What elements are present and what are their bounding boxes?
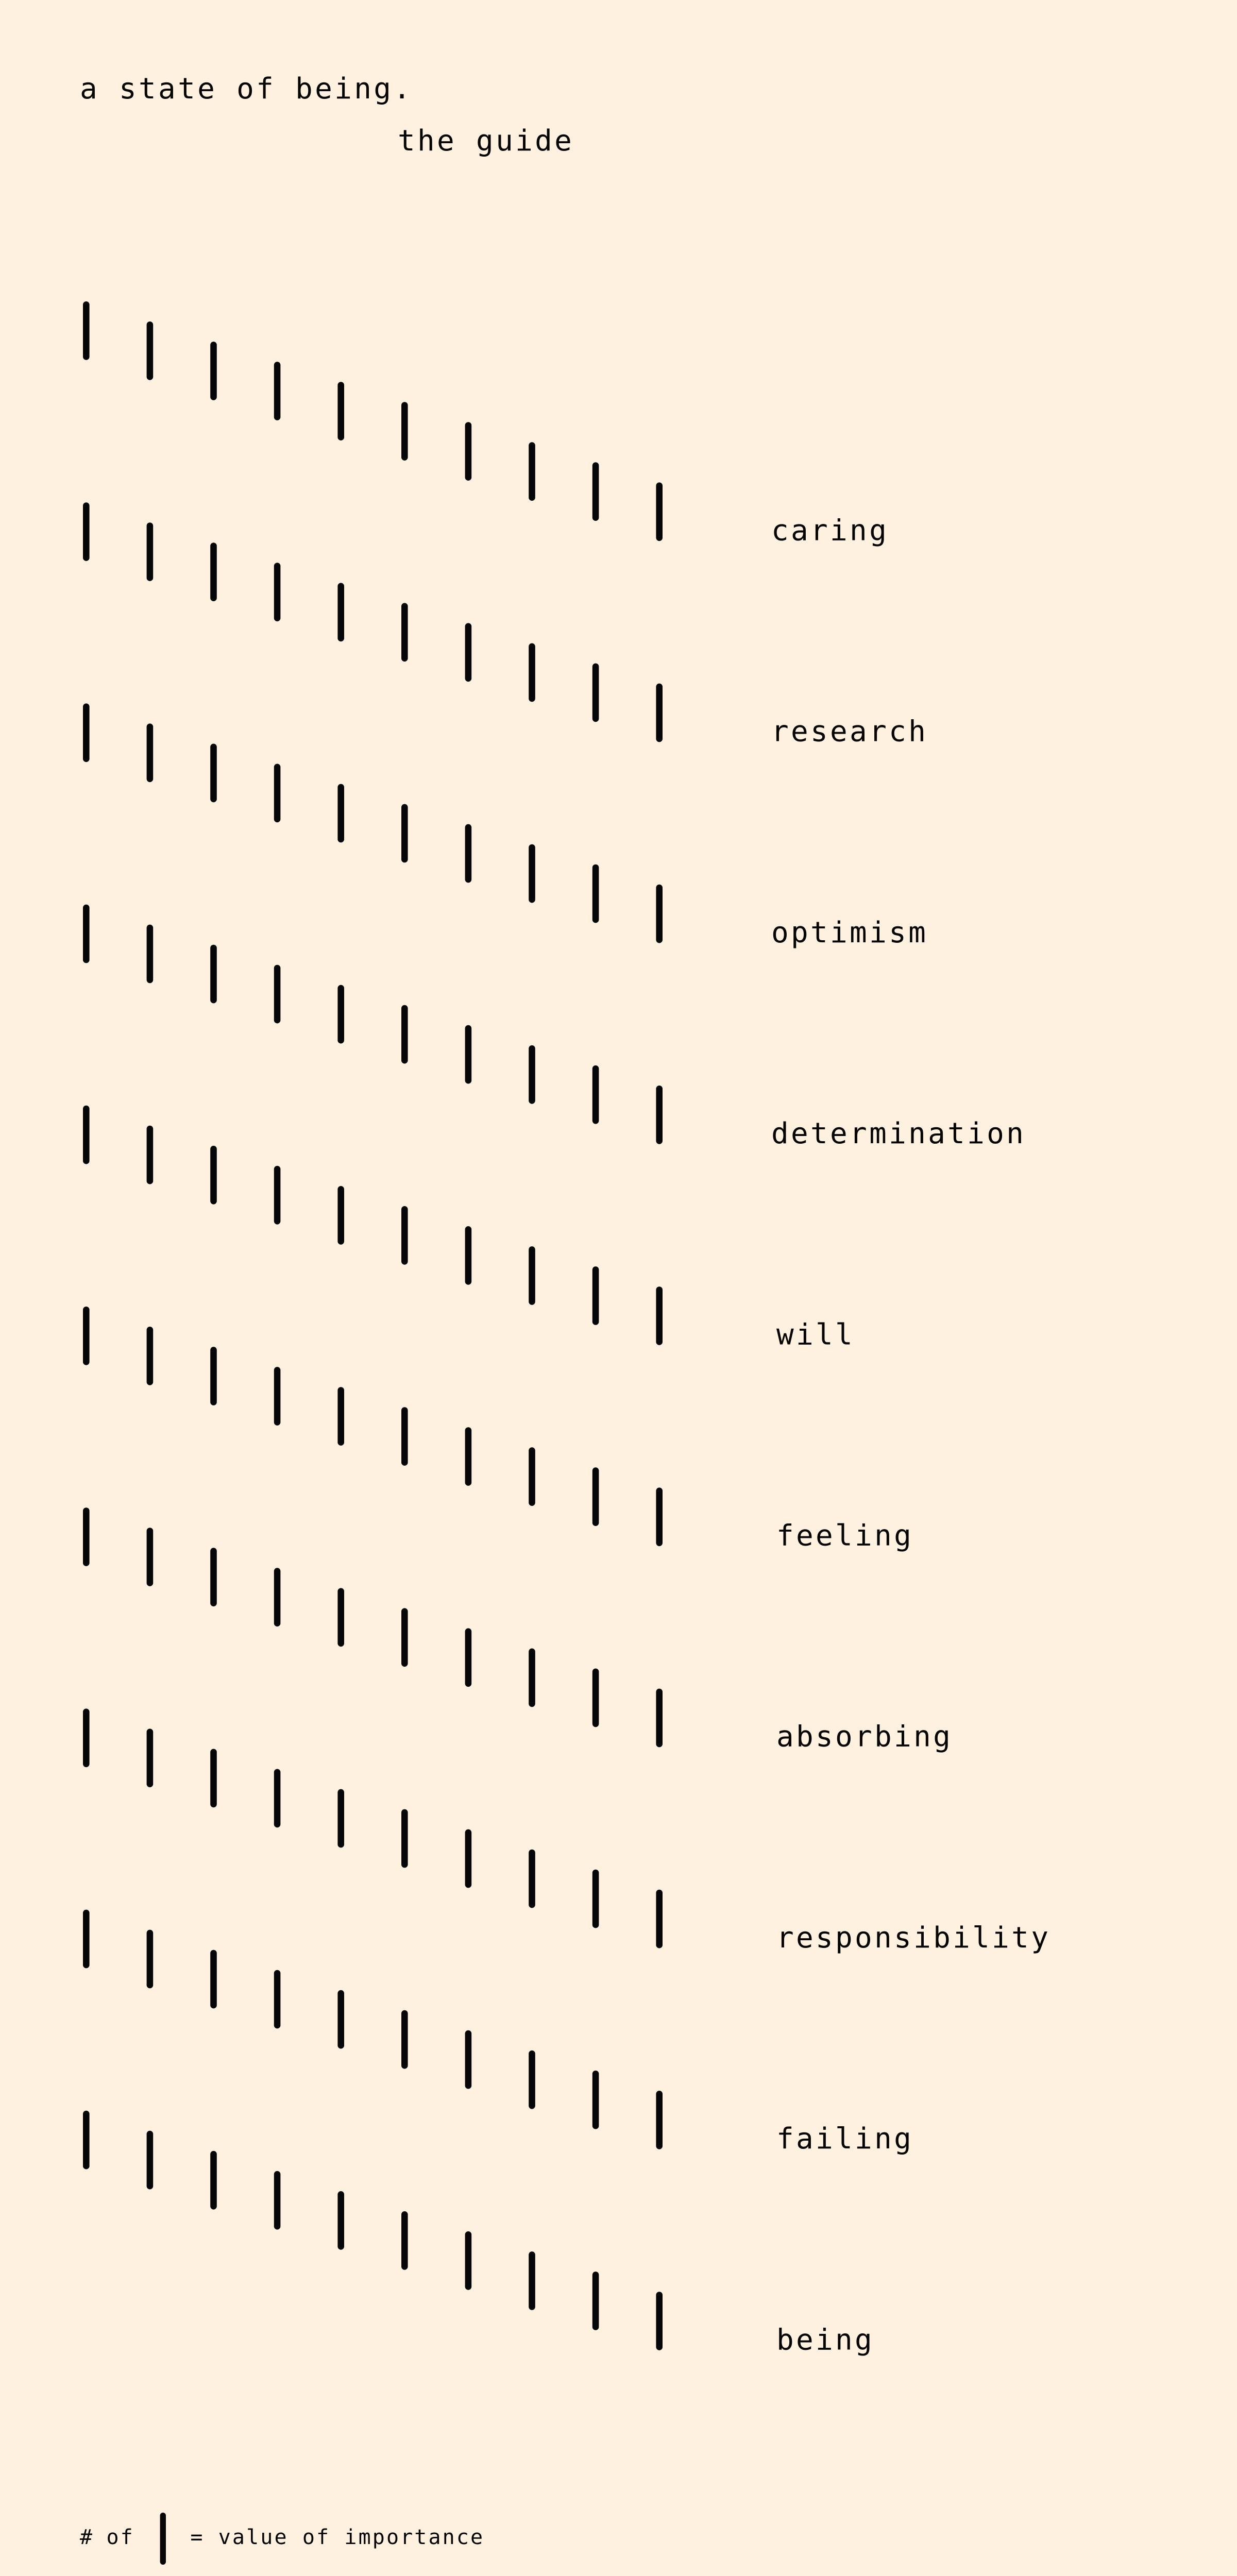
bars: responsibility [83,1708,663,1948]
legend text: # of: # [80,2526,94,2549]
label: will: will [776,1318,855,1351]
row: determination [83,905,1026,1150]
label: research: research [771,715,928,749]
bars: research [83,502,663,742]
bars: feeling [83,1307,663,1546]
label: optimism: optimism [771,916,928,950]
legend [80,2513,484,2565]
label: feeling: feeling [776,1519,913,1553]
row: absorbing [83,1507,953,1754]
title: a state of being. [80,72,413,106]
label: determination: determination [771,1117,1026,1150]
row: optimism [83,703,928,950]
bars: will [83,1106,663,1345]
label: absorbing: absorbing [776,1720,953,1754]
subtitle: the guide [398,124,574,158]
legend text: value of importance: = value of importance [190,2526,484,2549]
row: responsibility [83,1708,1050,1955]
bars: absorbing [83,1507,663,1747]
label: caring: caring [771,514,889,547]
row: being [83,2111,874,2357]
bars: determination [83,905,663,1144]
legend bar [160,2513,166,2565]
bars: caring [83,301,663,541]
row: failing [83,1910,913,2156]
label: failing: failing [776,2122,913,2156]
row: research [83,502,928,749]
bars: optimism [83,703,663,943]
row: will [83,1106,855,1351]
legend text: # of: of [106,2526,134,2549]
bars: failing [83,1910,663,2149]
label: responsibility: responsibility [776,1921,1050,1955]
bars: being [83,2111,663,2350]
row: caring [83,301,889,547]
row: feeling [83,1307,913,1553]
label: being: being [776,2323,874,2357]
